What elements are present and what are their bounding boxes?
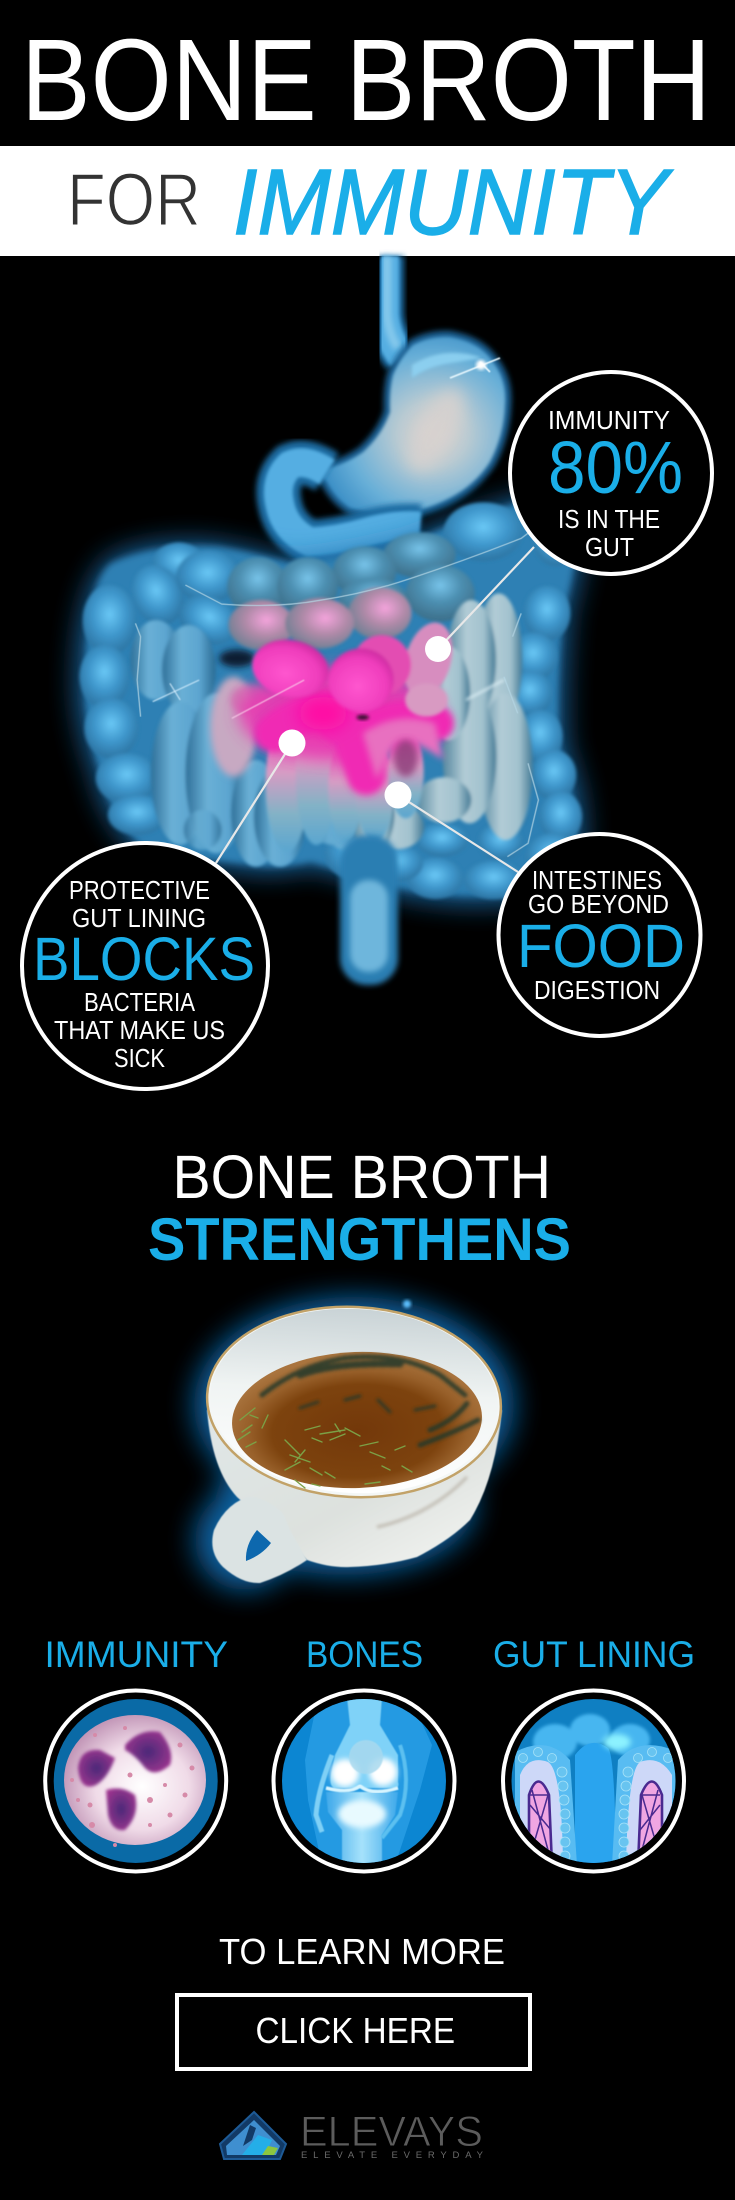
small intestine blue loops [130, 620, 370, 867]
callout: immunity 80%: 80% [548, 426, 683, 509]
rim [202, 1299, 506, 1505]
transverse colon grey row [227, 532, 475, 622]
sparkles [153, 680, 199, 702]
callout: gut lining blocks bacteria: THAT MAKE US [54, 1017, 225, 1045]
glow highlight [403, 1300, 411, 1308]
callout: intestines go beyond food digestion [384, 782, 700, 1036]
icon: knee bones [274, 1690, 454, 1872]
cup handle [212, 1497, 307, 1583]
callout: intestines go beyond food digestion: GO BEYOND [528, 891, 669, 919]
illustration: cup of bone broth [194, 1297, 514, 1590]
subtitle band: for immunity: FOR [67, 158, 201, 241]
callout: intestines go beyond food digestion: FOOD [517, 912, 685, 980]
magenta band [273, 710, 435, 777]
callout: gut lining blocks bacteria: BACTERIA [84, 989, 195, 1017]
heading: bone broth strengthens [148, 1143, 571, 1273]
magenta lobes [247, 617, 460, 717]
magenta soft mass [239, 667, 439, 760]
taenia lines [135, 515, 552, 857]
herbs dark [262, 1357, 478, 1445]
logo: elevays: ELEVATE EVERYDAY [301, 2150, 484, 2161]
herbs green [238, 1408, 412, 1488]
broth [230, 1348, 484, 1492]
callout: immunity 80% [425, 372, 712, 662]
colon left [80, 490, 582, 899]
subtitle band: for immunity: IMMUNITY [233, 150, 674, 254]
callout: immunity 80%: IS IN THE [558, 504, 660, 534]
icon: gut lining villi [503, 1690, 684, 1872]
esophagus [385, 256, 402, 358]
label: bones: BONES [306, 1634, 423, 1675]
transverse colon pink row [228, 587, 412, 650]
callout: intestines go beyond food digestion: DIGESTION [534, 977, 660, 1005]
label: gut lining: GUT LINING [493, 1634, 695, 1675]
callout: gut lining blocks bacteria [22, 730, 306, 1089]
stomach [315, 337, 505, 513]
button: click here [177, 1995, 530, 2069]
intestine mass (drawn in crop units) [76, 490, 584, 904]
callout: gut lining blocks bacteria: SICK [114, 1045, 165, 1073]
heading: bone broth strengthens: STRENGTHENS [148, 1206, 571, 1273]
icon: immune cell [45, 1690, 226, 1872]
button: click here: CLICK HERE [256, 2010, 455, 2051]
illustration: digestive system [76, 256, 584, 985]
logo: elevays: ELEVAYS [300, 2108, 483, 2156]
callout: gut lining blocks bacteria: BLOCKS [33, 925, 255, 993]
base silhouette [85, 497, 576, 896]
subtitle band: for immunity [0, 146, 735, 256]
heading: bone broth strengthens: BONE BROTH [172, 1143, 551, 1211]
cup body [207, 1410, 502, 1567]
cup glow [194, 1297, 514, 1590]
small dark gap [357, 715, 369, 720]
outer glow [76, 490, 584, 904]
callout: gut lining blocks bacteria: GUT LINING [72, 905, 206, 933]
legs fading from pink [266, 702, 424, 852]
appendix and rectum [340, 835, 398, 985]
label: immunity: IMMUNITY [44, 1634, 228, 1675]
callout: intestines go beyond food digestion: INTESTINES [532, 867, 662, 895]
callout: immunity 80%: IMMUNITY [548, 405, 670, 435]
logo: elevays [220, 2108, 484, 2161]
duodenum [278, 463, 420, 542]
callout: gut lining blocks bacteria: PROTECTIVE [69, 877, 210, 905]
callout: immunity 80%: GUT [585, 532, 634, 562]
dark gap left [219, 650, 255, 667]
small intestine pale right loops [352, 593, 533, 853]
call to action text: TO LEARN MORE [219, 1931, 505, 1972]
pink grey halo [210, 677, 257, 777]
